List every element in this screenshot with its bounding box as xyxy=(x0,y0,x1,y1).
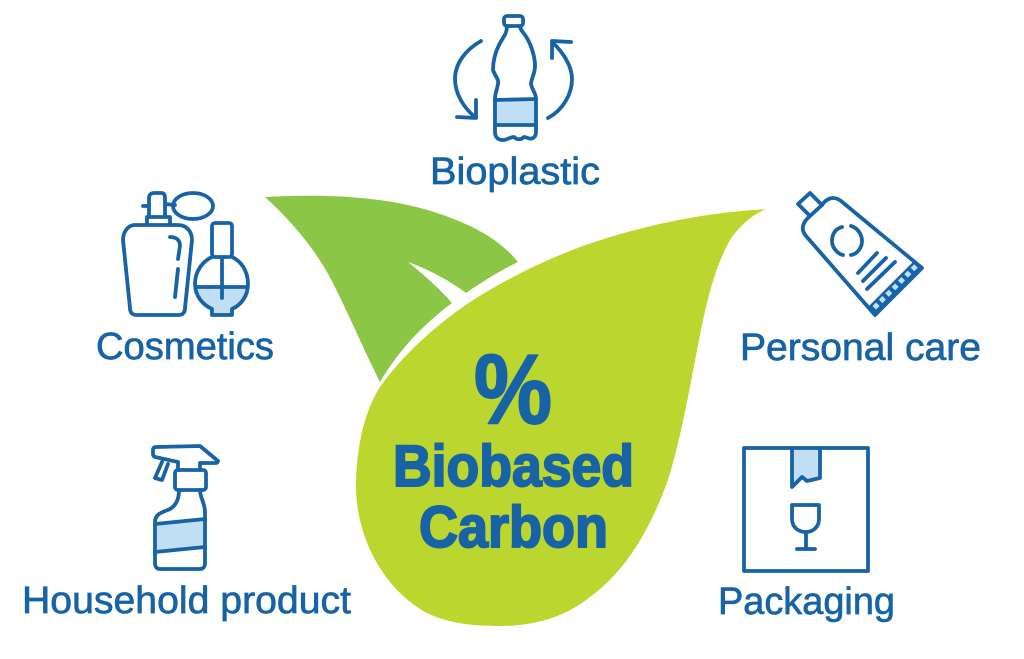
item: bioplastic xyxy=(430,16,600,193)
icon: perfume bottles xyxy=(123,193,248,315)
label: Cosmetics: Cosmetics xyxy=(96,326,274,368)
label: Bioplastic: Bioplastic xyxy=(430,151,600,193)
item: cosmetics xyxy=(96,193,274,368)
item: personal care xyxy=(740,193,981,369)
percent sign: % xyxy=(474,334,552,444)
icon: cream tube xyxy=(798,193,922,315)
item: packaging xyxy=(718,448,895,623)
Carbon: Carbon xyxy=(419,495,608,560)
label: Packaging: Packaging xyxy=(718,581,895,623)
label: Household product: Household product xyxy=(22,580,351,622)
dark green back leaf xyxy=(265,196,518,382)
light green front leaf xyxy=(356,209,766,626)
item: household product xyxy=(22,446,351,622)
center heading xyxy=(393,334,634,560)
label: Personal care: Personal care xyxy=(740,327,981,369)
icon: spray bottle xyxy=(153,446,218,569)
icon: bottle with recycling arrows xyxy=(455,16,572,140)
icon: fragile box xyxy=(744,448,868,571)
Biobased: Biobased xyxy=(393,434,634,499)
